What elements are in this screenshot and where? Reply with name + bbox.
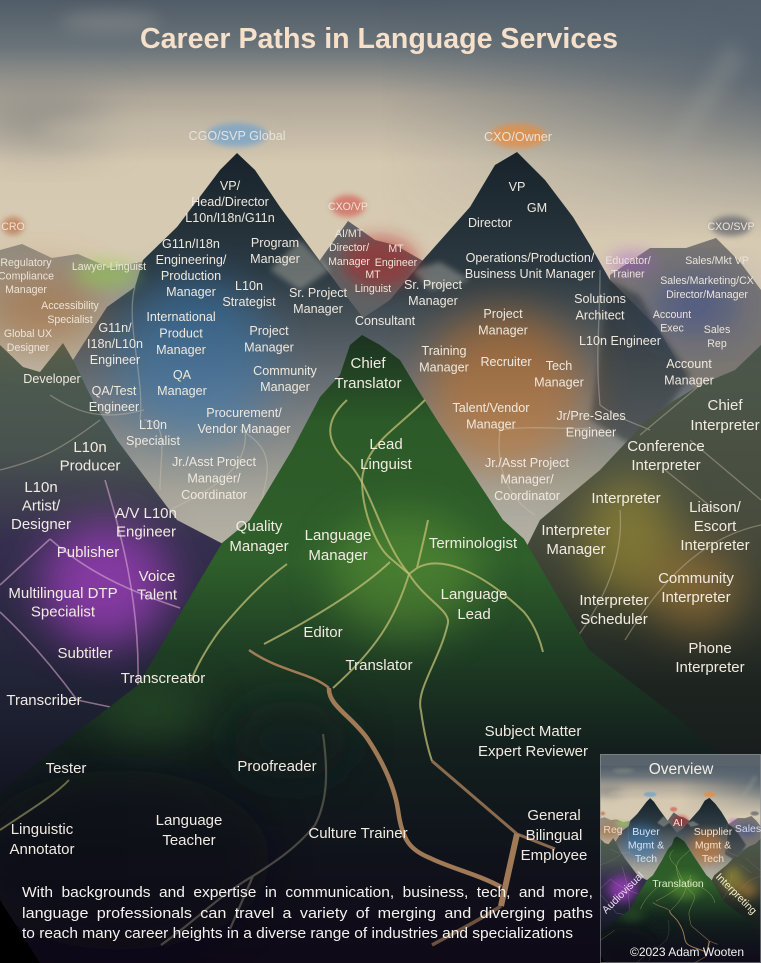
Procurement/Vendor Manager: Procurement/ [206, 406, 282, 420]
Subject Matter Expert Reviewer: Subject Matter [485, 723, 581, 740]
Subtitler: Subtitler [57, 645, 113, 662]
Training Manager: Manager [419, 360, 469, 374]
Buyer Mgmt & Tech: Mgmt & [628, 840, 664, 852]
Chief Interpreter: Chief [707, 397, 743, 414]
Language Lead: Lead [457, 606, 491, 623]
International Product Manager: International [146, 310, 216, 324]
CXO/VP: CXO/VP [328, 201, 368, 213]
Interpreter: Interpreter [591, 490, 661, 507]
Conference Interpreter: Conference [627, 438, 705, 455]
Sales/Marketing/CX Director/Manager: Sales/Marketing/CX [660, 275, 754, 287]
Regulatory Compliance Manager: Regulatory [0, 257, 52, 269]
VP/Head/Director L10n: VP/ [220, 179, 241, 193]
Tech Manager: Manager [534, 376, 584, 390]
Talent/Vendor Manager: Manager [466, 418, 516, 432]
Sr. Project Manager: Sr. Project [289, 286, 348, 300]
Supplier Mgmt & Tech: Tech [702, 853, 724, 865]
Quality Manager: Quality [236, 518, 283, 535]
description text: to reach many career heights in a diverse range of industries and specializations [22, 925, 573, 942]
Language Teacher: Language [156, 812, 222, 829]
labels: translation mountain [9, 355, 588, 864]
Jr./Asst Project Manager/Coordinator: Coordinator [494, 489, 560, 503]
Liaison/Escort Interpreter: Liaison/ [689, 499, 742, 516]
Buyer Mgmt & Tech: Buyer [632, 826, 660, 838]
Solutions Architect: Architect [576, 308, 625, 322]
Sales/Marketing/CX Director/Manager: Director/Manager [666, 289, 748, 301]
Solutions Architect: Solutions [574, 292, 626, 306]
VP: VP [509, 180, 525, 194]
Tester: Tester [46, 760, 86, 777]
Educator/Trainer: Educator/ [605, 255, 651, 267]
Lead Linguist: Lead [369, 436, 403, 453]
Voice Talent: Talent [137, 586, 178, 604]
AI/MT Director/Manager: Manager [328, 256, 370, 268]
Liaison/Escort Interpreter: Interpreter [680, 537, 750, 554]
Transcreator: Transcreator [121, 670, 205, 687]
Director: Director [468, 216, 512, 230]
Quality Manager: Manager [229, 538, 289, 555]
G11n/I18n Engineering/Production Manager: Manager [166, 285, 216, 299]
Chief Interpreter: Interpreter [690, 417, 760, 434]
Global UX Designer: Global UX [4, 328, 52, 340]
Account Exec: Account [653, 309, 691, 321]
Language Manager: Manager [308, 547, 368, 564]
Phone Interpreter: Phone [688, 640, 732, 657]
VP/Head/Director L10n: L10n/I18n/G11n [185, 211, 275, 225]
General Bilingual Employee: Employee [521, 847, 587, 864]
Subject Matter Expert Reviewer: Expert Reviewer [478, 743, 588, 760]
Buyer Mgmt & Tech: Tech [635, 853, 657, 865]
Interpreter Scheduler: Scheduler [580, 611, 648, 628]
Project Manager: Manager [478, 324, 528, 338]
Jr./Asst Project Manager/Coordinator: Coordinator [181, 488, 247, 502]
Procurement/Vendor Manager: Vendor Manager [197, 422, 291, 436]
labels: audiovisual mountain [6, 439, 205, 709]
GM: GM [527, 201, 547, 215]
Editor: Editor [303, 624, 343, 641]
Conference Interpreter: Interpreter [631, 457, 701, 474]
Community Interpreter: Interpreter [661, 589, 731, 606]
MT Engineer: MT [388, 243, 404, 255]
Supplier Mgmt & Tech: Mgmt & [695, 840, 731, 852]
Operations/Production/Business Unit Manager: Operations/Production/ [466, 251, 595, 265]
Chief Translator: Chief [350, 355, 386, 372]
Phone Interpreter: Interpreter [675, 659, 745, 676]
Chief Translator: Translator [335, 375, 401, 392]
Culture Trainer: Culture Trainer [308, 825, 408, 842]
L10n Strategist: L10n [235, 279, 263, 293]
Recruiter: Recruiter [480, 355, 532, 369]
Supplier Mgmt & Tech: Supplier [694, 826, 733, 838]
Community Manager: Community [253, 364, 318, 378]
Reg: Reg [603, 824, 623, 836]
Developer: Developer [23, 372, 81, 386]
Educator/Trainer: Trainer [611, 268, 645, 280]
L10n Engineer: L10n Engineer [579, 334, 661, 348]
Linguistic Annotator: Annotator [9, 841, 75, 858]
Translation: Translation [652, 878, 704, 890]
Project Manager: Project [249, 324, 289, 338]
Talent/Vendor Manager: Talent/Vendor [452, 401, 530, 415]
Terminologist: Terminologist [429, 535, 518, 552]
Linguistic Annotator: Linguistic [11, 821, 74, 838]
Sr. Project Manager: Manager [293, 302, 343, 316]
G11n/I18n/L10n Engineer: I18n/L10n [87, 337, 143, 351]
description text: With backgrounds and expertise in communication, business, tech, and more, [22, 884, 593, 901]
MT Engineer: Engineer [375, 257, 418, 269]
Program Manager: Program [251, 236, 299, 250]
G11n/I18n Engineering/Production Manager: G11n/I18n [162, 237, 220, 251]
labels: interpreting mountain [541, 397, 760, 676]
A/V L10n Engineer: A/V L10n [115, 505, 177, 522]
Multilingual DTP Specialist: Specialist [31, 604, 96, 620]
Jr/Pre-Sales Engineer: Jr/Pre-Sales [556, 409, 626, 423]
VP/Head/Director L10n: Head/Director [191, 195, 269, 209]
G11n/I18n Engineering/Production Manager: Engineering/ [156, 253, 227, 267]
Account Manager: Manager [664, 374, 714, 388]
Audiovisual: Audiovisual [600, 870, 646, 916]
Language Lead: Language [441, 586, 507, 603]
AI/MT Director/Manager: AI/MT [335, 228, 364, 240]
MT Linguist: MT [365, 269, 381, 281]
Lawyer-Linguist: Lawyer-Linguist [72, 261, 146, 273]
Jr./Asst Project Manager/Coordinator: Jr./Asst Project [172, 455, 256, 469]
Sr. Project Manager: Manager [408, 294, 458, 308]
Consultant: Consultant [355, 314, 416, 328]
Project Manager: Manager [244, 340, 294, 354]
Voice Talent: Voice [139, 568, 175, 585]
labels: buyer-side mountain [23, 129, 348, 502]
Lead Linguist: Linguist [360, 456, 413, 473]
Sales/Mkt VP: Sales/Mkt VP [685, 255, 749, 267]
A/V L10n Engineer: Engineer [116, 524, 176, 540]
QA/Test Engineer: Engineer [89, 400, 139, 414]
labels: sales and education mountains [605, 221, 755, 388]
Sales: Sales [735, 823, 761, 835]
Account Exec: Exec [660, 322, 684, 334]
General Bilingual Employee: Bilingual [526, 827, 582, 844]
L10n Specialist: Specialist [126, 434, 180, 448]
Language Teacher: Teacher [162, 832, 216, 849]
G11n/I18n Engineering/Production Manager: Production [161, 269, 221, 283]
Global UX Designer: Designer [7, 342, 50, 354]
Community Manager: Manager [260, 380, 310, 394]
MT Linguist: Linguist [355, 283, 391, 295]
Publisher: Publisher [57, 544, 119, 561]
L10n Artist/Designer: Designer [11, 516, 71, 533]
Translator: Translator [346, 657, 412, 674]
G11n/I18n/L10n Engineer: G11n/ [98, 321, 132, 335]
Program Manager: Manager [250, 252, 300, 266]
L10n Specialist: L10n [139, 418, 167, 432]
L10n Artist/Designer: L10n [24, 479, 58, 496]
Liaison/Escort Interpreter: Escort [694, 518, 737, 535]
International Product Manager: Manager [156, 343, 206, 357]
CXO/SVP: CXO/SVP [707, 221, 755, 233]
Interpreter Scheduler: Interpreter [579, 592, 649, 609]
labels: regulatory and AI mountains [0, 201, 418, 354]
Multilingual DTP Specialist: Multilingual DTP [8, 585, 118, 602]
Accessibility Specialist: Specialist [47, 314, 93, 326]
Community Interpreter: Community [658, 570, 734, 587]
copyright: ©2023 Adam Wooten [630, 945, 744, 959]
L10n Strategist: Strategist [222, 295, 276, 309]
G11n/I18n/L10n Engineer: Engineer [90, 353, 140, 367]
title: Career Paths in Language Services [140, 23, 618, 55]
labels: supplier-side mountain [404, 130, 661, 503]
Tech Manager: Tech [546, 359, 572, 373]
Language Manager: Language [305, 527, 371, 544]
overview heading: Overview [649, 761, 714, 778]
General Bilingual Employee: General [527, 807, 581, 824]
Interpreter Manager: Manager [546, 541, 606, 558]
Jr./Asst Project Manager/Coordinator: Jr./Asst Project [485, 456, 569, 470]
Operations/Production/Business Unit Manager: Business Unit Manager [465, 267, 595, 281]
Proofreader: Proofreader [237, 758, 317, 775]
Jr./Asst Project Manager/Coordinator: Manager/ [187, 472, 241, 486]
Regulatory Compliance Manager: Manager [5, 284, 47, 296]
Interpreting: Interpreting [713, 871, 759, 917]
Project Manager: Project [483, 307, 523, 321]
AI: AI [673, 817, 683, 829]
Jr./Asst Project Manager/Coordinator: Manager/ [500, 472, 554, 486]
L10n Producer: Producer [60, 458, 120, 474]
Training Manager: Training [421, 344, 467, 358]
L10n Producer: L10n [73, 439, 107, 456]
QA/Test Engineer: QA/Test [92, 384, 137, 398]
Transcriber: Transcriber [6, 692, 82, 709]
CGO/SVP Global: CGO/SVP Global [188, 129, 286, 143]
Account Manager: Account [666, 357, 712, 371]
Sr. Project Manager: Sr. Project [404, 278, 463, 292]
Interpreter Manager: Interpreter [541, 522, 611, 539]
panel: overview inset [594, 754, 761, 963]
CRO: CRO [1, 221, 25, 233]
Accessibility Specialist: Accessibility [41, 300, 100, 312]
International Product Manager: Product [159, 326, 203, 340]
description text [22, 884, 593, 942]
CXO/Owner: CXO/Owner [484, 130, 552, 144]
Sales Rep: Sales [704, 324, 730, 336]
description text: language professionals can travel a variety of merging and diverging paths [22, 905, 593, 922]
Jr/Pre-Sales Engineer: Engineer [566, 426, 616, 440]
QA Manager: Manager [157, 384, 207, 398]
QA Manager: QA [173, 368, 192, 382]
L10n Artist/Designer: Artist/ [22, 498, 61, 514]
Sales Rep: Rep [707, 338, 727, 350]
AI/MT Director/Manager: Director/ [329, 242, 369, 254]
